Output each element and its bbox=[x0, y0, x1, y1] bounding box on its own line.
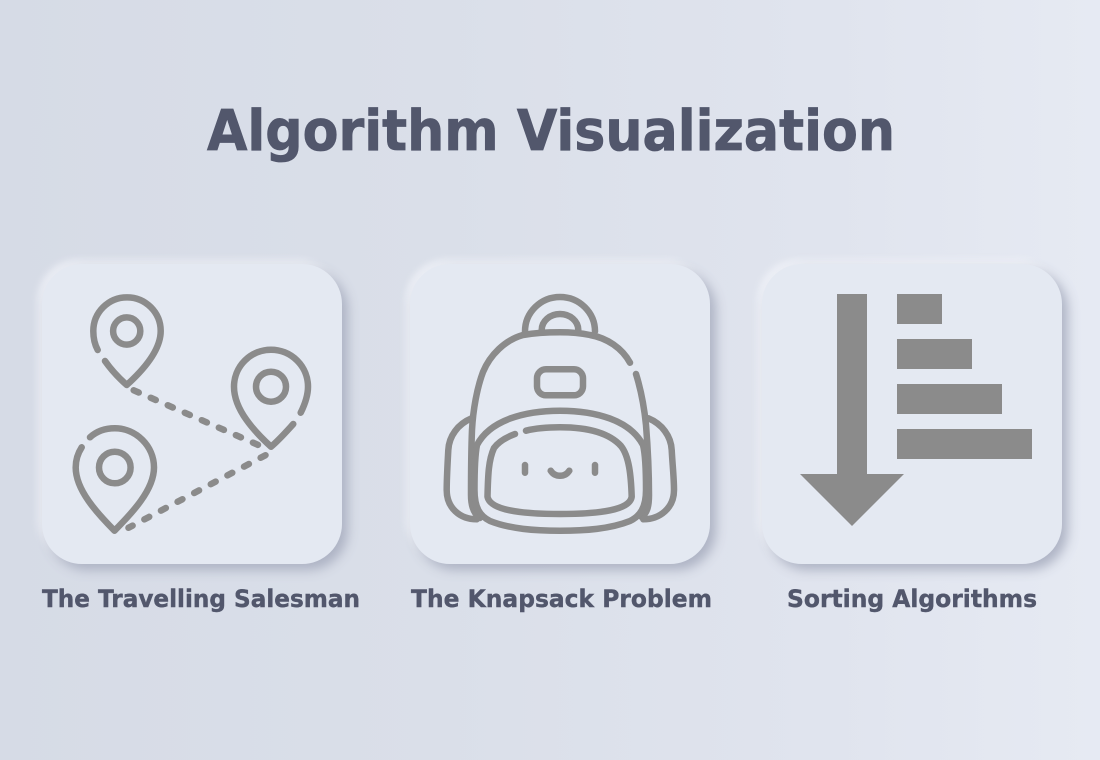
pin: right bbox=[234, 350, 308, 447]
dotted route: top pin to right pin bbox=[134, 390, 259, 445]
label: travelling salesman: The Travelling Salesman bbox=[42, 585, 360, 613]
bars bbox=[897, 294, 1032, 459]
pin: top left bbox=[93, 297, 161, 385]
panel: sorting card bbox=[762, 264, 1062, 564]
title: Algorithm Visualization bbox=[207, 99, 895, 164]
label: knapsack: The Knapsack Problem bbox=[411, 585, 712, 613]
icon: sorting arrow and bars bbox=[800, 294, 1032, 526]
backpack side pockets bbox=[447, 418, 674, 519]
backpack tag bbox=[537, 369, 583, 395]
label: sorting: Sorting Algorithms bbox=[787, 585, 1037, 613]
dotted route: right pin to bottom pin bbox=[128, 455, 266, 528]
pin: bottom left bbox=[76, 428, 154, 531]
icon: map pins with dotted route bbox=[76, 297, 308, 531]
icon: backpack bbox=[447, 297, 674, 531]
panel: knapsack card bbox=[410, 264, 710, 564]
backpack handle bbox=[525, 297, 595, 332]
backpack face bbox=[525, 465, 595, 476]
backpack body bbox=[471, 332, 649, 518]
panel: travelling salesman card bbox=[42, 264, 342, 564]
arrow bbox=[800, 294, 904, 526]
backpack front pocket bbox=[474, 411, 646, 531]
